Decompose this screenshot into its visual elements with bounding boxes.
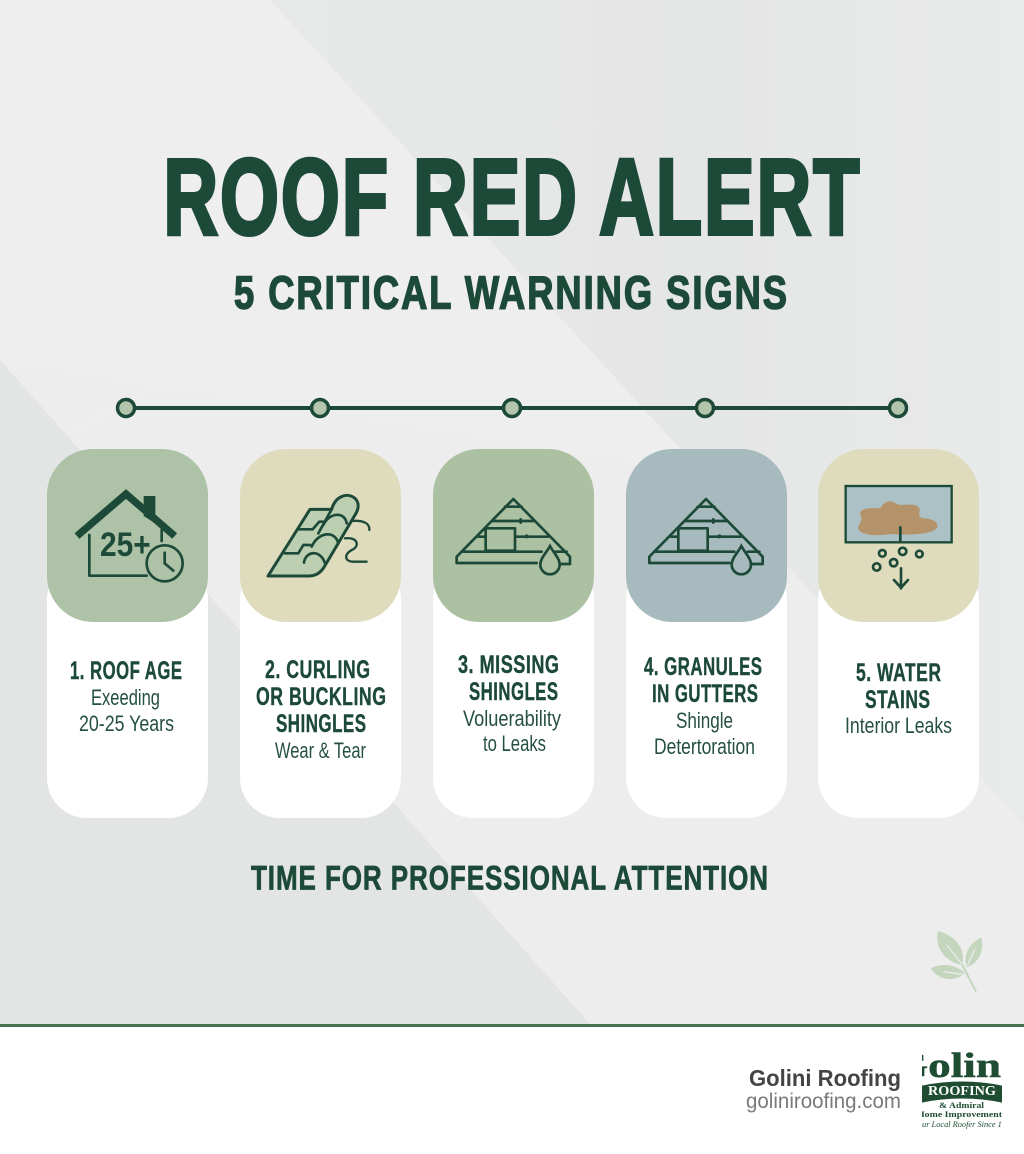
heading: 1. ROOF AGE	[70, 657, 182, 685]
heading	[458, 651, 560, 706]
logo: Home Improvement	[917, 1109, 1002, 1119]
description: Exeeding	[91, 685, 160, 710]
description: 20-25 Years	[79, 711, 174, 736]
description: Voluerability	[463, 706, 561, 731]
logo: ROOFING	[928, 1084, 996, 1099]
heading: IN GUTTERS	[652, 680, 758, 708]
heading	[644, 653, 762, 708]
icon: water stain	[846, 486, 952, 588]
description: Wear & Tear	[275, 738, 366, 763]
description: Shingle	[676, 708, 733, 733]
heading: SHINGLES	[276, 710, 366, 738]
website: goliniroofing.com	[746, 1090, 901, 1113]
heading: 5. WATER	[856, 659, 942, 687]
logo	[922, 1052, 1002, 1129]
heading: 2. CURLING	[265, 656, 370, 684]
icon: leaf	[931, 931, 982, 991]
heading: STAINS	[865, 686, 930, 714]
description	[654, 708, 755, 759]
icon: attic with drop	[649, 499, 763, 574]
icon: curling shingles	[268, 495, 369, 576]
heading	[256, 656, 386, 738]
logo: Your Local Roofer Since 19	[914, 1119, 1007, 1129]
heading: 4. GRANULES	[644, 653, 762, 681]
heading: 3. MISSING	[458, 651, 560, 679]
icon: house with clock	[77, 494, 183, 581]
description	[463, 706, 561, 756]
timeline	[118, 400, 906, 416]
heading: SHINGLES	[469, 678, 558, 706]
subtitle: 5 CRITICAL WARNING SIGNS	[234, 266, 789, 318]
call to action: TIME FOR PROFESSIONAL ATTENTION	[251, 860, 769, 898]
icon: attic with drop	[457, 499, 570, 574]
description: Interior Leaks	[845, 713, 952, 738]
description: Detertoration	[654, 734, 755, 759]
description	[79, 685, 174, 736]
icon: house with clock: 25+	[100, 526, 151, 564]
panel: card 4 granules in gutters	[626, 449, 787, 818]
brand name: Golini Roofing	[749, 1065, 901, 1091]
heading: OR BUCKLING	[256, 683, 386, 711]
panel: card 2 curling shingles	[240, 449, 401, 818]
logo: Golin	[893, 1046, 1001, 1085]
footer	[0, 1024, 1024, 1129]
logo: & Admiral	[939, 1100, 985, 1110]
description: to Leaks	[483, 731, 546, 756]
heading	[856, 659, 942, 714]
panel: card 3 missing shingles	[433, 449, 594, 818]
panel: card 1 roof age	[47, 449, 208, 818]
panel: card 5 water stains	[818, 449, 979, 818]
